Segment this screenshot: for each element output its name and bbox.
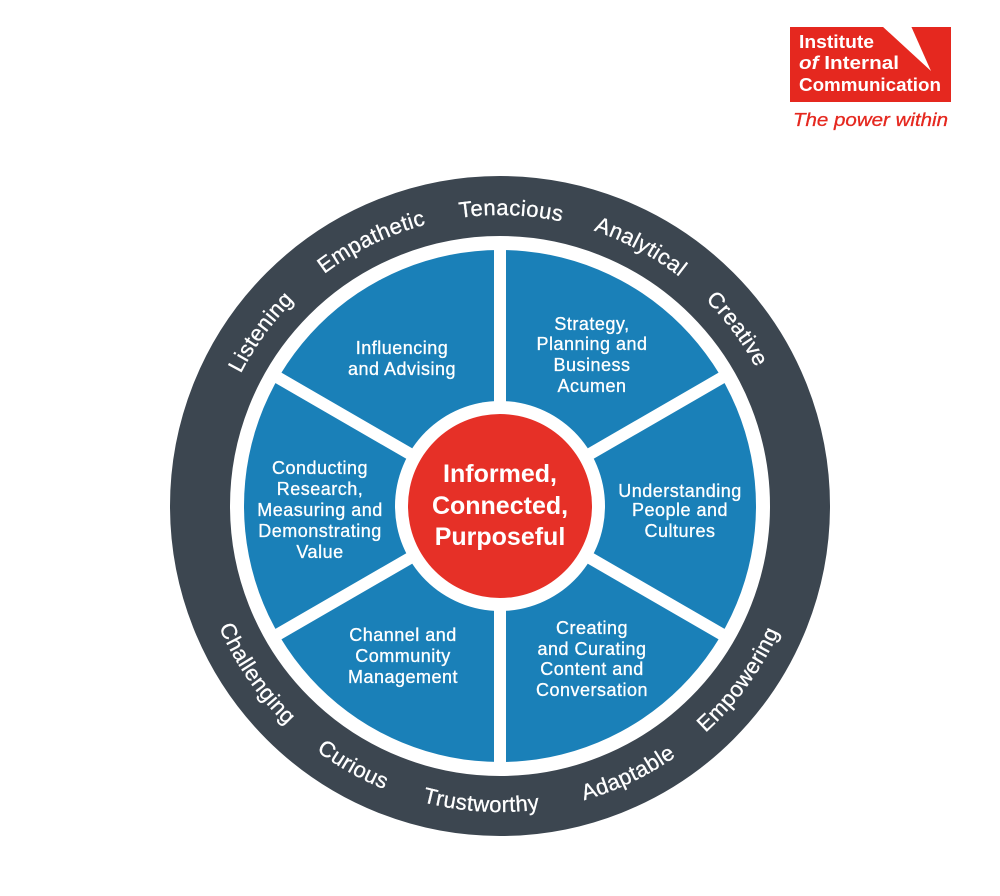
segment: Influencing: and Advising — [348, 359, 456, 379]
hub white border — [395, 401, 605, 611]
segment: Conducting: Measuring and — [257, 500, 383, 520]
segment: Strategy: Planning and — [536, 334, 648, 354]
segment dividers — [270, 240, 730, 772]
attribute: Tenacious: Tenacious — [458, 200, 562, 221]
attribute: Adaptable: Adaptable — [584, 748, 674, 800]
attribute: Curious: Curious — [320, 741, 387, 788]
logo: Institute of Internal Communication — [790, 26, 951, 130]
segment: Conducting: Research, — [277, 479, 363, 499]
attribute: Empathetic: Empathetic — [316, 212, 424, 274]
segment: Strategy: Acumen — [557, 376, 627, 396]
segment: Conducting: Conducting — [272, 458, 368, 478]
segment: Understanding: People and — [632, 500, 728, 520]
attribute: Challenging: Challenging — [221, 624, 294, 726]
segment: Strategy: Strategy, — [554, 314, 630, 334]
hub red circle — [408, 414, 592, 598]
centre hub — [395, 401, 605, 611]
attribute: Listening: Listening — [228, 293, 295, 372]
segment: Conducting: Demonstrating — [258, 521, 382, 541]
attribute: Creative: Creative — [708, 292, 764, 366]
logo name: Institute — [799, 32, 874, 52]
hub text: Connected, — [432, 492, 568, 520]
hub text: Informed, — [443, 460, 557, 488]
attribute: Empowering: Empowering — [696, 628, 782, 732]
attribute: Trustworthy: Trustworthy — [426, 787, 538, 816]
outer ring: attributes — [170, 176, 830, 836]
segment: Channel: Community — [355, 646, 451, 666]
segment: Creating: Content and — [540, 659, 644, 679]
segment: Understanding: Understanding — [618, 481, 742, 501]
hub text: Purposeful — [435, 523, 565, 551]
segment: Strategy: Business — [553, 355, 631, 375]
logo speech notch — [882, 26, 931, 71]
attribute: Analytical: Analytical — [594, 218, 688, 276]
wheel: competency segments — [244, 240, 756, 772]
segment: Creating: Creating — [556, 618, 628, 638]
segment: Creating: and Curating — [537, 639, 647, 659]
segment: Channel: Channel and — [349, 625, 457, 645]
segment: Channel: Management — [348, 667, 458, 687]
blue disc — [244, 250, 756, 762]
logo name: Communication — [799, 75, 941, 95]
segment: Understanding: Cultures — [644, 521, 716, 541]
logo tagline: The power within — [793, 109, 948, 130]
dark ring — [200, 206, 800, 806]
logo name — [799, 32, 941, 95]
logo red panel — [790, 27, 951, 102]
segment: Influencing: Influencing — [356, 338, 448, 358]
logo name: of Internal — [799, 53, 899, 73]
segment: Conducting: Value — [296, 542, 344, 562]
segment: Creating: Conversation — [536, 680, 648, 700]
